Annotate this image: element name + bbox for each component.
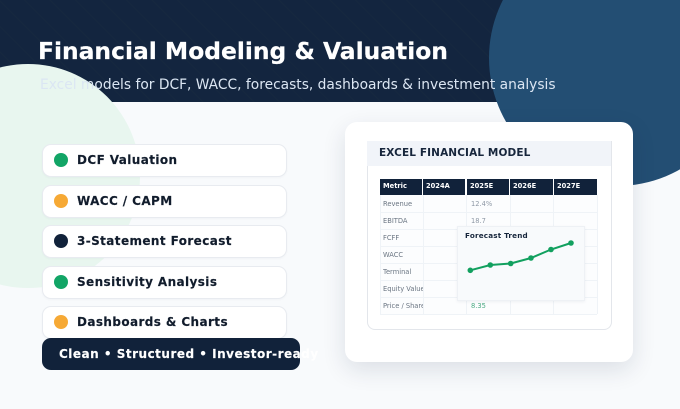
line chart — [468, 240, 574, 274]
feature: WACC / CAPM — [42, 184, 287, 218]
decorative circle: left — [0, 64, 140, 288]
feature: Sensitivity Analysis — [42, 266, 287, 298]
column header: 2024A — [423, 179, 465, 195]
feature: 3-Statement Forecast — [42, 225, 287, 258]
revenue value: 12.4% — [471, 200, 492, 208]
row labels: WACC — [383, 251, 403, 259]
tagline bar — [42, 338, 300, 370]
EBITDA value: 18.7 — [471, 217, 486, 225]
column header: 2026E — [510, 179, 553, 195]
feature: Dashboards & Charts — [42, 306, 287, 339]
decorative circle: top right — [489, 0, 680, 186]
column header: 2025E — [467, 179, 509, 195]
feature: Sensitivity Analysis: Sensitivity Analysis — [77, 274, 217, 288]
column header: Metric — [380, 179, 422, 195]
title: Financial Modeling & Valuation — [38, 37, 448, 65]
column header: 2024A: 2024A — [426, 182, 450, 190]
feature: DCF Valuation: DCF Valuation — [77, 153, 177, 167]
column header: Metric: Metric — [383, 182, 407, 190]
panel heading — [367, 141, 611, 166]
row labels: FCFF — [383, 234, 399, 242]
header band — [0, 0, 680, 102]
card: excel financial model — [345, 122, 633, 362]
column header: 2025E: 2025E — [470, 182, 493, 190]
column header: 2026E: 2026E — [513, 182, 536, 190]
feature: DCF Valuation — [42, 144, 287, 177]
chart popup: forecast trend — [457, 226, 585, 301]
tagline text: Clean • Structured • Investor-ready — [59, 347, 319, 361]
row labels: EBITDA — [383, 217, 407, 225]
column header: 2027E: 2027E — [557, 182, 580, 190]
subtitle: Excel models for DCF, WACC, forecasts, dashboards & investment analysis — [40, 77, 556, 93]
feature: Dashboards & Charts: Dashboards & Charts — [77, 315, 228, 329]
price per share value: 8.35 — [471, 302, 486, 310]
chart title: Forecast Trend — [465, 231, 528, 240]
inner panel — [367, 141, 612, 330]
column header: 2027E — [554, 179, 597, 195]
row labels: Revenue — [383, 200, 412, 208]
row labels — [383, 200, 423, 310]
row labels: Terminal — [383, 268, 411, 276]
feature: WACC / CAPM: WACC / CAPM — [77, 194, 173, 208]
feature: 3-Statement Forecast: 3-Statement Forecast — [77, 234, 232, 248]
panel heading: EXCEL FINANCIAL MODEL — [379, 147, 530, 159]
